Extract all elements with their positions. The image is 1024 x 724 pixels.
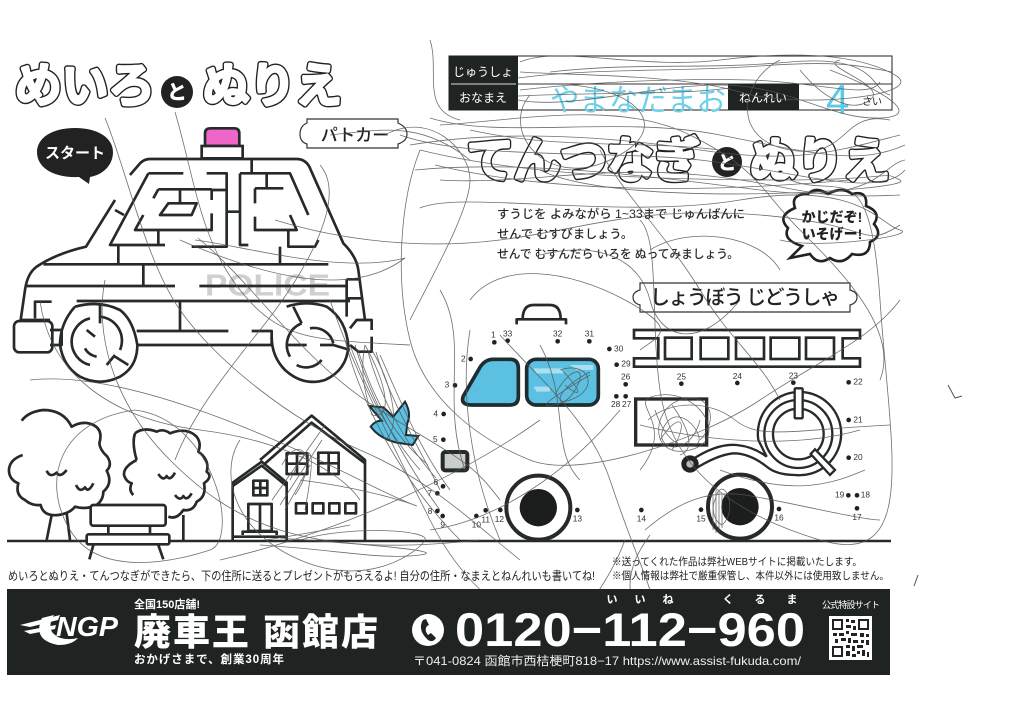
dot numbers: 17 — [852, 512, 862, 522]
dot numbers: 13 — [573, 514, 582, 524]
front bumper — [14, 321, 52, 352]
title: maze and coloring: めいろ — [15, 59, 155, 112]
dot numbers: 4 — [433, 409, 438, 419]
dot numbers: 7 — [427, 488, 432, 498]
windows — [463, 359, 598, 405]
title: connect the dots and coloring: てんつなぎ — [467, 135, 700, 188]
dot numbers: 5 — [433, 434, 438, 444]
house — [233, 416, 365, 540]
dot numbers: 6 — [434, 477, 439, 487]
site label: 公式特設サイト — [822, 599, 880, 610]
phone ruby: い — [606, 594, 618, 606]
title: maze and coloring: ぬりえ — [203, 59, 342, 112]
dot numbers: 26 — [621, 372, 631, 382]
car outline — [21, 159, 365, 320]
dot numbers: 24 — [733, 371, 742, 381]
dot numbers: 21 — [853, 414, 863, 424]
stray marks — [914, 385, 962, 586]
dot numbers: 27 — [622, 399, 632, 409]
callout: hurry, it's a fire: かじだぞ! — [802, 209, 862, 225]
phone ruby: く — [722, 594, 734, 606]
roof hatch — [517, 305, 566, 324]
title: maze and coloring: めいろ — [15, 59, 155, 112]
dot numbers: 25 — [677, 372, 686, 382]
maze walls — [27, 159, 362, 345]
phone ruby: る — [754, 593, 766, 606]
tree left — [9, 410, 110, 540]
dot numbers: 15 — [696, 513, 706, 523]
wheels — [50, 303, 350, 382]
dot numbers: 32 — [553, 328, 563, 338]
dot numbers: 11 — [481, 514, 490, 524]
ladder — [634, 330, 860, 367]
maze: police car — [14, 128, 372, 382]
instructions text: せんで むすびましょう。 — [497, 227, 633, 241]
store name — [134, 597, 378, 666]
note: send your work: めいろとぬりえ・てんつなぎができたら、下の住所に送るとプレゼントがもらえるよ! 自分の住所・なまえとねんれいも書いてね! — [8, 568, 595, 583]
numbered dots — [435, 338, 859, 518]
phone ruby — [606, 593, 798, 606]
title: connect the dots and coloring: ぬりえ — [750, 135, 890, 188]
door handle — [443, 452, 467, 470]
form: name, address, age — [449, 56, 892, 123]
dot numbers: 33 — [503, 328, 513, 338]
tree right — [124, 430, 209, 540]
dot numbers: 31 — [585, 328, 594, 338]
dot-to-dot: fire engine — [427, 305, 870, 540]
handwritten name: やまなだまお — [550, 83, 726, 118]
store name: 廃車王 函館店 — [134, 612, 378, 653]
ground line — [7, 540, 891, 542]
dot numbers: 14 — [637, 514, 646, 524]
phone ruby: ま — [786, 593, 798, 606]
notes: disclaimers: ※送ってくれた作品は弊社WEBサイトに掲載いたします。 — [612, 555, 862, 568]
dot numbers: 19 — [835, 490, 845, 500]
address and url: 〒041-0824 函館市西桔梗町818−17 https://www.assist-fukuda.com/ — [413, 653, 802, 668]
form: name, address, age: さい — [862, 96, 882, 108]
logo: NGP — [20, 611, 118, 645]
dot numbers: 1 — [491, 329, 496, 339]
speech bubble: start: スタート — [45, 145, 105, 162]
scene: trees, bench, house — [9, 402, 418, 559]
notes: disclaimers: ※個人情報は弊社で厳重保管し、本件以外には使用致しません。 — [612, 569, 889, 582]
instructions text — [497, 206, 745, 261]
dot numbers: 20 — [853, 452, 863, 462]
instructions text: すうじを よみながら 1~33まで じゅんばんに — [497, 206, 745, 221]
form: name, address, age: おなまえ — [459, 91, 507, 105]
label: patrol car — [300, 119, 407, 148]
label: fire engine — [633, 283, 857, 312]
footer banner — [7, 589, 890, 675]
panel window — [636, 399, 707, 445]
title: maze and coloring: ぬりえ — [203, 59, 342, 112]
dot numbers: 2 — [461, 353, 466, 363]
bird — [369, 402, 418, 445]
label: fire engine: しょうぼう じどうしゃ — [650, 286, 840, 309]
handwritten age: 4 — [826, 76, 849, 123]
siren light — [202, 128, 243, 158]
store name: おかげさまで、創業30周年 — [134, 652, 284, 666]
dot numbers: 16 — [774, 513, 784, 523]
phone icon — [412, 614, 444, 646]
logo: NGP: NGP — [56, 611, 118, 642]
dot numbers: 28 — [611, 399, 621, 409]
dot numbers: 8 — [428, 506, 433, 516]
notes: disclaimers — [612, 555, 889, 582]
title: connect the dots and coloring: てんつなぎ — [467, 135, 700, 188]
speech bubble: start — [37, 128, 113, 184]
callout: hurry, it's a fire — [783, 190, 878, 261]
dot numbers: 9 — [440, 519, 445, 529]
wheels — [506, 475, 772, 540]
dot numbers: 23 — [789, 371, 798, 381]
dot numbers: 3 — [445, 380, 450, 390]
label: patrol car: パトカー — [321, 126, 389, 145]
phone number: 0120−112−960 — [455, 603, 805, 656]
dot numbers: 22 — [853, 377, 863, 387]
instructions text: せんで むすんだら いろを ぬってみましょう。 — [497, 247, 739, 261]
form: name, address, age: じゅうしょ — [453, 65, 513, 79]
QR code — [829, 616, 872, 660]
dot numbers: 12 — [495, 514, 504, 524]
dot numbers — [427, 328, 870, 529]
scribbles — [30, 40, 905, 640]
rear bumper — [350, 320, 372, 352]
title: connect the dots and coloring: ぬりえ — [750, 135, 890, 188]
callout: hurry, it's a fire: いそげー! — [802, 226, 862, 242]
title: connect the dots and coloring — [467, 135, 890, 188]
dot numbers: 18 — [861, 490, 870, 500]
bench — [87, 505, 169, 559]
police text: POLICE — [205, 268, 330, 302]
phone ruby: い — [634, 594, 646, 606]
dot numbers: 29 — [621, 358, 631, 368]
dot numbers: 10 — [472, 519, 481, 529]
store name: 全国150店舗! — [134, 597, 200, 611]
title: maze and coloring — [15, 59, 342, 112]
dot numbers: 30 — [614, 343, 624, 353]
phone ruby: ね — [662, 593, 674, 606]
title: connect the dots and coloring: と — [717, 152, 737, 174]
hose reel — [681, 388, 841, 475]
form: name, address, age: ねんれい — [739, 91, 787, 105]
title: maze and coloring: と — [167, 82, 187, 104]
